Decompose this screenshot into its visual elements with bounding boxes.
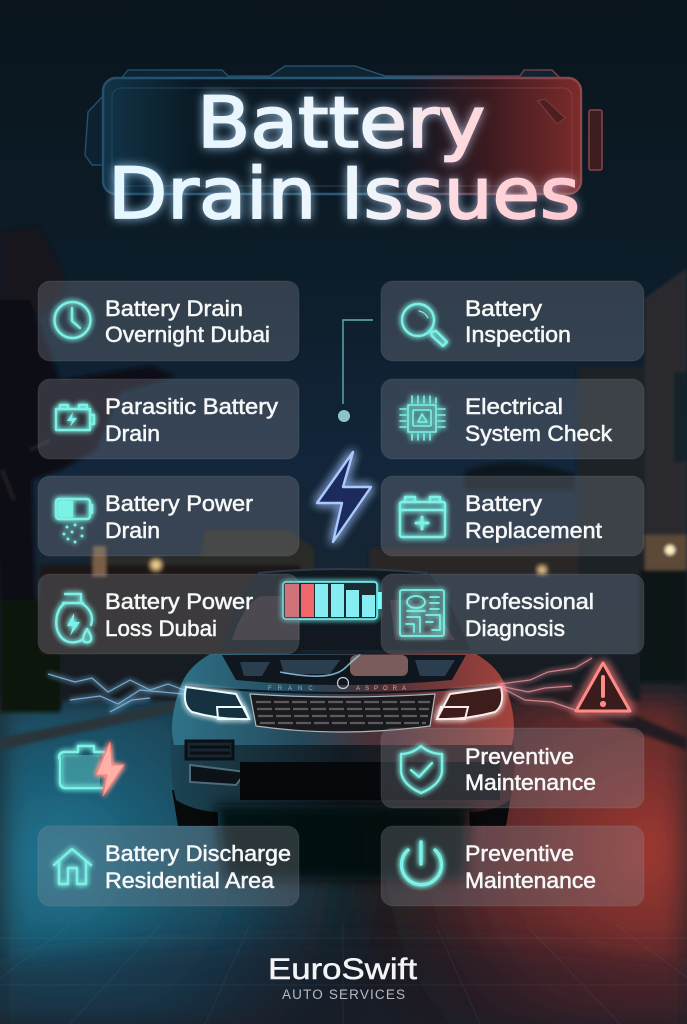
card text: Electrical xyxy=(465,394,563,419)
icon: power symbol xyxy=(402,842,442,885)
entrance glow right xyxy=(645,535,687,572)
logo xyxy=(268,953,418,1002)
window right xyxy=(674,372,687,462)
card text xyxy=(105,394,279,446)
roof line xyxy=(258,569,428,573)
logo wordmark: EuroSwift xyxy=(268,953,418,986)
distant palms xyxy=(465,463,575,490)
upper body xyxy=(172,654,514,745)
card: Preventive Maintenance (shield) xyxy=(381,728,644,808)
wall left of road xyxy=(60,654,640,700)
lower intake xyxy=(240,762,500,800)
card: Battery Replacement xyxy=(381,476,644,556)
card: Battery Drain Overnight Dubai xyxy=(38,281,299,361)
frame inner outline xyxy=(112,88,572,186)
card text: Battery Power xyxy=(105,589,254,614)
card text: Loss Dubai xyxy=(105,616,217,641)
card text xyxy=(465,589,594,641)
engine cover xyxy=(350,655,408,676)
bottom vignette xyxy=(0,938,687,1024)
card text: Preventive xyxy=(465,744,574,769)
card text: Maintenance xyxy=(465,770,596,795)
card text: Battery xyxy=(465,491,543,516)
card text xyxy=(105,296,270,347)
house lights centre right xyxy=(537,565,547,575)
card text: Parasitic Battery xyxy=(105,394,279,419)
fog lamp xyxy=(190,765,246,785)
car tyres xyxy=(172,790,512,826)
title battery frame xyxy=(85,66,602,194)
palm frond highlight xyxy=(2,440,50,500)
road surface xyxy=(0,700,687,1024)
teal road glow xyxy=(0,700,687,1024)
engine parts xyxy=(240,660,455,676)
logo tagline: AUTO SERVICES xyxy=(282,987,405,1002)
frame left ear xyxy=(85,96,103,165)
card: Battery Power Drain xyxy=(38,476,299,556)
building right xyxy=(645,268,687,570)
card text: Inspection xyxy=(465,322,571,347)
card: Preventive Maintenance (power) xyxy=(381,826,644,906)
building left xyxy=(0,226,66,320)
blue current in engine xyxy=(280,655,360,676)
icon: central lightning bolt xyxy=(317,452,371,542)
card text: Diagnosis xyxy=(465,616,565,641)
gauge red cells xyxy=(285,584,314,617)
bonnet lettering: FRANC xyxy=(268,686,319,692)
card text xyxy=(465,491,603,543)
card: Battery Power Loss Dubai xyxy=(38,574,299,654)
frame right terminal xyxy=(589,110,602,170)
houses in the distance xyxy=(90,530,314,575)
icon: shield with check xyxy=(401,746,442,793)
warm column left xyxy=(93,546,106,576)
palm crown xyxy=(0,300,175,620)
seats xyxy=(232,596,455,640)
card text xyxy=(465,296,571,347)
road grid xyxy=(0,925,687,1024)
gauge glow xyxy=(283,582,377,619)
card text: Replacement xyxy=(465,518,603,543)
card: Battery Inspection xyxy=(381,281,644,361)
card: Battery Discharge Residential Area xyxy=(38,826,299,906)
icon: bottle with bolt and drop xyxy=(56,594,92,642)
icon: battery with bolt xyxy=(56,405,94,430)
card text: Maintenance xyxy=(465,868,596,893)
title line 1: Battery xyxy=(197,82,485,164)
right headlight xyxy=(437,687,502,719)
card text: Drain xyxy=(105,518,160,543)
card text: Drain xyxy=(105,421,160,446)
card text: Battery xyxy=(465,296,543,321)
card: Parasitic Battery Drain xyxy=(38,379,299,459)
icon: warning triangle xyxy=(576,663,630,711)
gauge cyan cells xyxy=(315,584,375,617)
emblem xyxy=(338,678,348,688)
scenery layer xyxy=(0,226,687,750)
icon: circuit chip xyxy=(400,396,445,440)
shrubs left xyxy=(0,600,70,712)
card text xyxy=(105,841,291,893)
houses right of centre xyxy=(370,540,580,575)
grille xyxy=(250,694,435,732)
frame body xyxy=(103,78,581,194)
icon: diagnostic panel xyxy=(400,590,444,636)
icon: magnifier xyxy=(402,304,447,346)
under car shadow xyxy=(215,805,470,880)
curb left xyxy=(0,702,175,750)
engine bay xyxy=(222,655,466,685)
card text xyxy=(105,491,254,543)
connector line xyxy=(343,320,373,404)
left energy arcs xyxy=(48,674,184,712)
lower bumper vent xyxy=(186,741,233,759)
card text: Overnight Dubai xyxy=(105,322,270,347)
frame top tabs xyxy=(120,66,560,80)
lower body xyxy=(171,730,515,812)
red road glow xyxy=(0,700,687,1024)
card text: Preventive xyxy=(465,841,574,866)
windshield battery gauge xyxy=(283,582,382,619)
card text: Professional xyxy=(465,589,594,614)
card text: Battery Discharge xyxy=(105,841,291,866)
building mid block xyxy=(578,366,645,575)
icon: clock xyxy=(54,302,90,338)
title xyxy=(108,82,580,235)
left headlight xyxy=(185,687,249,719)
icon: house xyxy=(54,849,91,884)
gauge terminal xyxy=(378,592,382,609)
card text: System Check xyxy=(465,421,613,446)
card text: Residential Area xyxy=(105,868,274,893)
card text xyxy=(465,841,596,893)
porch lamp xyxy=(665,545,675,555)
warm light left xyxy=(150,559,162,571)
bonnet edge xyxy=(187,686,497,693)
card: Professional Diagnosis xyxy=(381,574,644,654)
car xyxy=(171,569,515,880)
icon: battery plus xyxy=(400,497,445,537)
card: Electrical System Check xyxy=(381,379,644,459)
wall right xyxy=(640,570,687,682)
card text xyxy=(465,744,596,795)
title line 2: Drain Issues xyxy=(108,153,580,235)
card text xyxy=(105,589,254,641)
curb right xyxy=(520,682,687,750)
windshield and cabin xyxy=(220,569,470,650)
bonnet lettering right: ASPORA xyxy=(356,686,411,692)
frame corner glyph xyxy=(538,99,565,124)
connector dot xyxy=(338,410,350,422)
card text: Battery Drain xyxy=(105,296,243,321)
icon: battery draining xyxy=(56,499,92,544)
right energy arcs xyxy=(500,658,592,710)
card text: Battery Power xyxy=(105,491,254,516)
house lower wall xyxy=(40,565,300,654)
icon: discharging battery xyxy=(59,742,124,796)
card text xyxy=(465,394,613,446)
